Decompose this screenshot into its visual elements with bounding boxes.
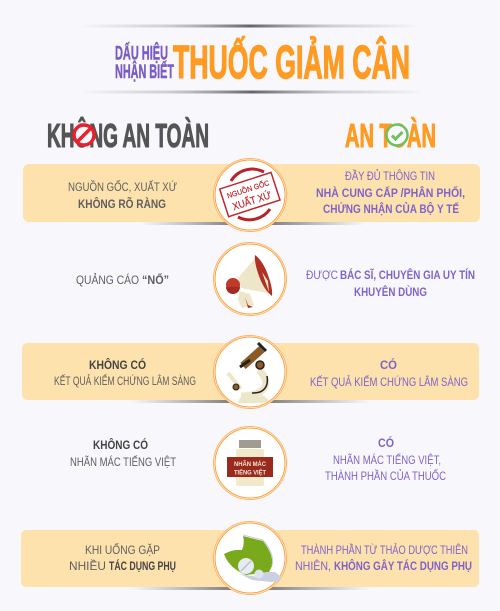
icon: green check — [386, 124, 408, 146]
text: row 4 left: NHÃN MÁC TIẾNG VIỆT — [70, 454, 177, 469]
text: row 1 right: NHÀ CUNG CẤP /PHÂN PHỐI, — [316, 185, 465, 200]
text: row 1 right: ĐẦY ĐỦ THÔNG TIN — [345, 168, 435, 183]
panel: row 5 band — [21, 530, 479, 590]
text: row 5 right: NHIÊN, — [295, 558, 331, 573]
icon: origin stamp: NGUỒN GỐC — [226, 177, 271, 200]
text: row 5 left: KHI UỐNG GẶP — [85, 542, 160, 557]
heading: an toàn: AN TOÀN — [345, 117, 436, 154]
text: row 1 left — [68, 179, 177, 211]
text: row 5 left: NHIỀU — [69, 558, 106, 573]
text: row 3 left: KẾT QUẢ KIỂM CHỨNG LÂM SÀNG — [54, 373, 196, 388]
text: row 4 left — [70, 437, 177, 469]
text: row 4 left: KHÔNG CÓ — [93, 437, 148, 452]
heading: không an toàn: KHÔNG AN TOÀN — [47, 116, 209, 154]
icon: microscope — [214, 336, 286, 408]
text: row 4 right: THÀNH PHẦN CỦA THUỐC — [325, 468, 446, 483]
icon: herb leaf and pills — [214, 522, 286, 594]
icon: origin stamp — [214, 158, 286, 232]
text: row 3 left — [54, 357, 196, 388]
panel: row 1 band — [23, 164, 480, 225]
icon: megaphone — [214, 242, 286, 316]
icon: prohibited sign — [74, 125, 94, 145]
text: row 2 left: QUẢNG CÁO — [76, 272, 139, 287]
subtitle — [115, 42, 174, 83]
text: row 4 right: CÓ — [378, 435, 394, 450]
text: row 4 right: NHÃN MÁC TIẾNG VIỆT, — [333, 452, 441, 467]
text: row 1 left: NGUỒN GỐC, XUẤT XỨ — [68, 179, 177, 194]
text: row 2 right: KHUYÊN DÙNG — [354, 284, 427, 299]
heading: an toàn — [345, 117, 436, 154]
text: row 5 left — [69, 542, 176, 573]
text: row 2 right: BÁC SĨ, CHUYÊN GIA UY TÍN — [340, 267, 475, 282]
text: row 3 left: KHÔNG CÓ — [89, 357, 146, 372]
text: row 1 left: KHÔNG RÕ RÀNG — [78, 196, 166, 211]
subtitle: DẤU HIỆU — [115, 42, 168, 64]
text: row 3 right — [310, 357, 468, 389]
text: row 2 right — [306, 267, 475, 299]
text: row 2 right: ĐƯỢC — [306, 268, 338, 282]
text: row 1 right — [316, 168, 465, 216]
icon: labelled bottle — [214, 426, 286, 500]
text: row 5 left: TÁC DỤNG PHỤ — [109, 558, 176, 573]
text: row 5 right: KHÔNG GÂY TÁC DỤNG PHỤ — [334, 558, 472, 573]
heading: không an toàn — [47, 116, 209, 154]
icon: labelled bottle: NHÃN MÁC — [234, 461, 267, 468]
text: row 1 right: CHỨNG NHẬN CỦA BỘ Y TẾ — [323, 201, 459, 216]
text: row 4 right — [325, 435, 446, 483]
icon: labelled bottle: TIẾNG VIỆT — [234, 468, 266, 476]
subtitle: NHẬN BIẾT — [115, 61, 174, 83]
icon: origin stamp: XUẤT XỨ — [231, 188, 273, 213]
title — [115, 36, 410, 88]
text: row 3 right: CÓ — [380, 357, 397, 372]
text: row 2 left: “NỔ” — [142, 272, 169, 287]
panel: row 3 band — [22, 343, 479, 403]
text: row 5 right — [295, 542, 472, 573]
